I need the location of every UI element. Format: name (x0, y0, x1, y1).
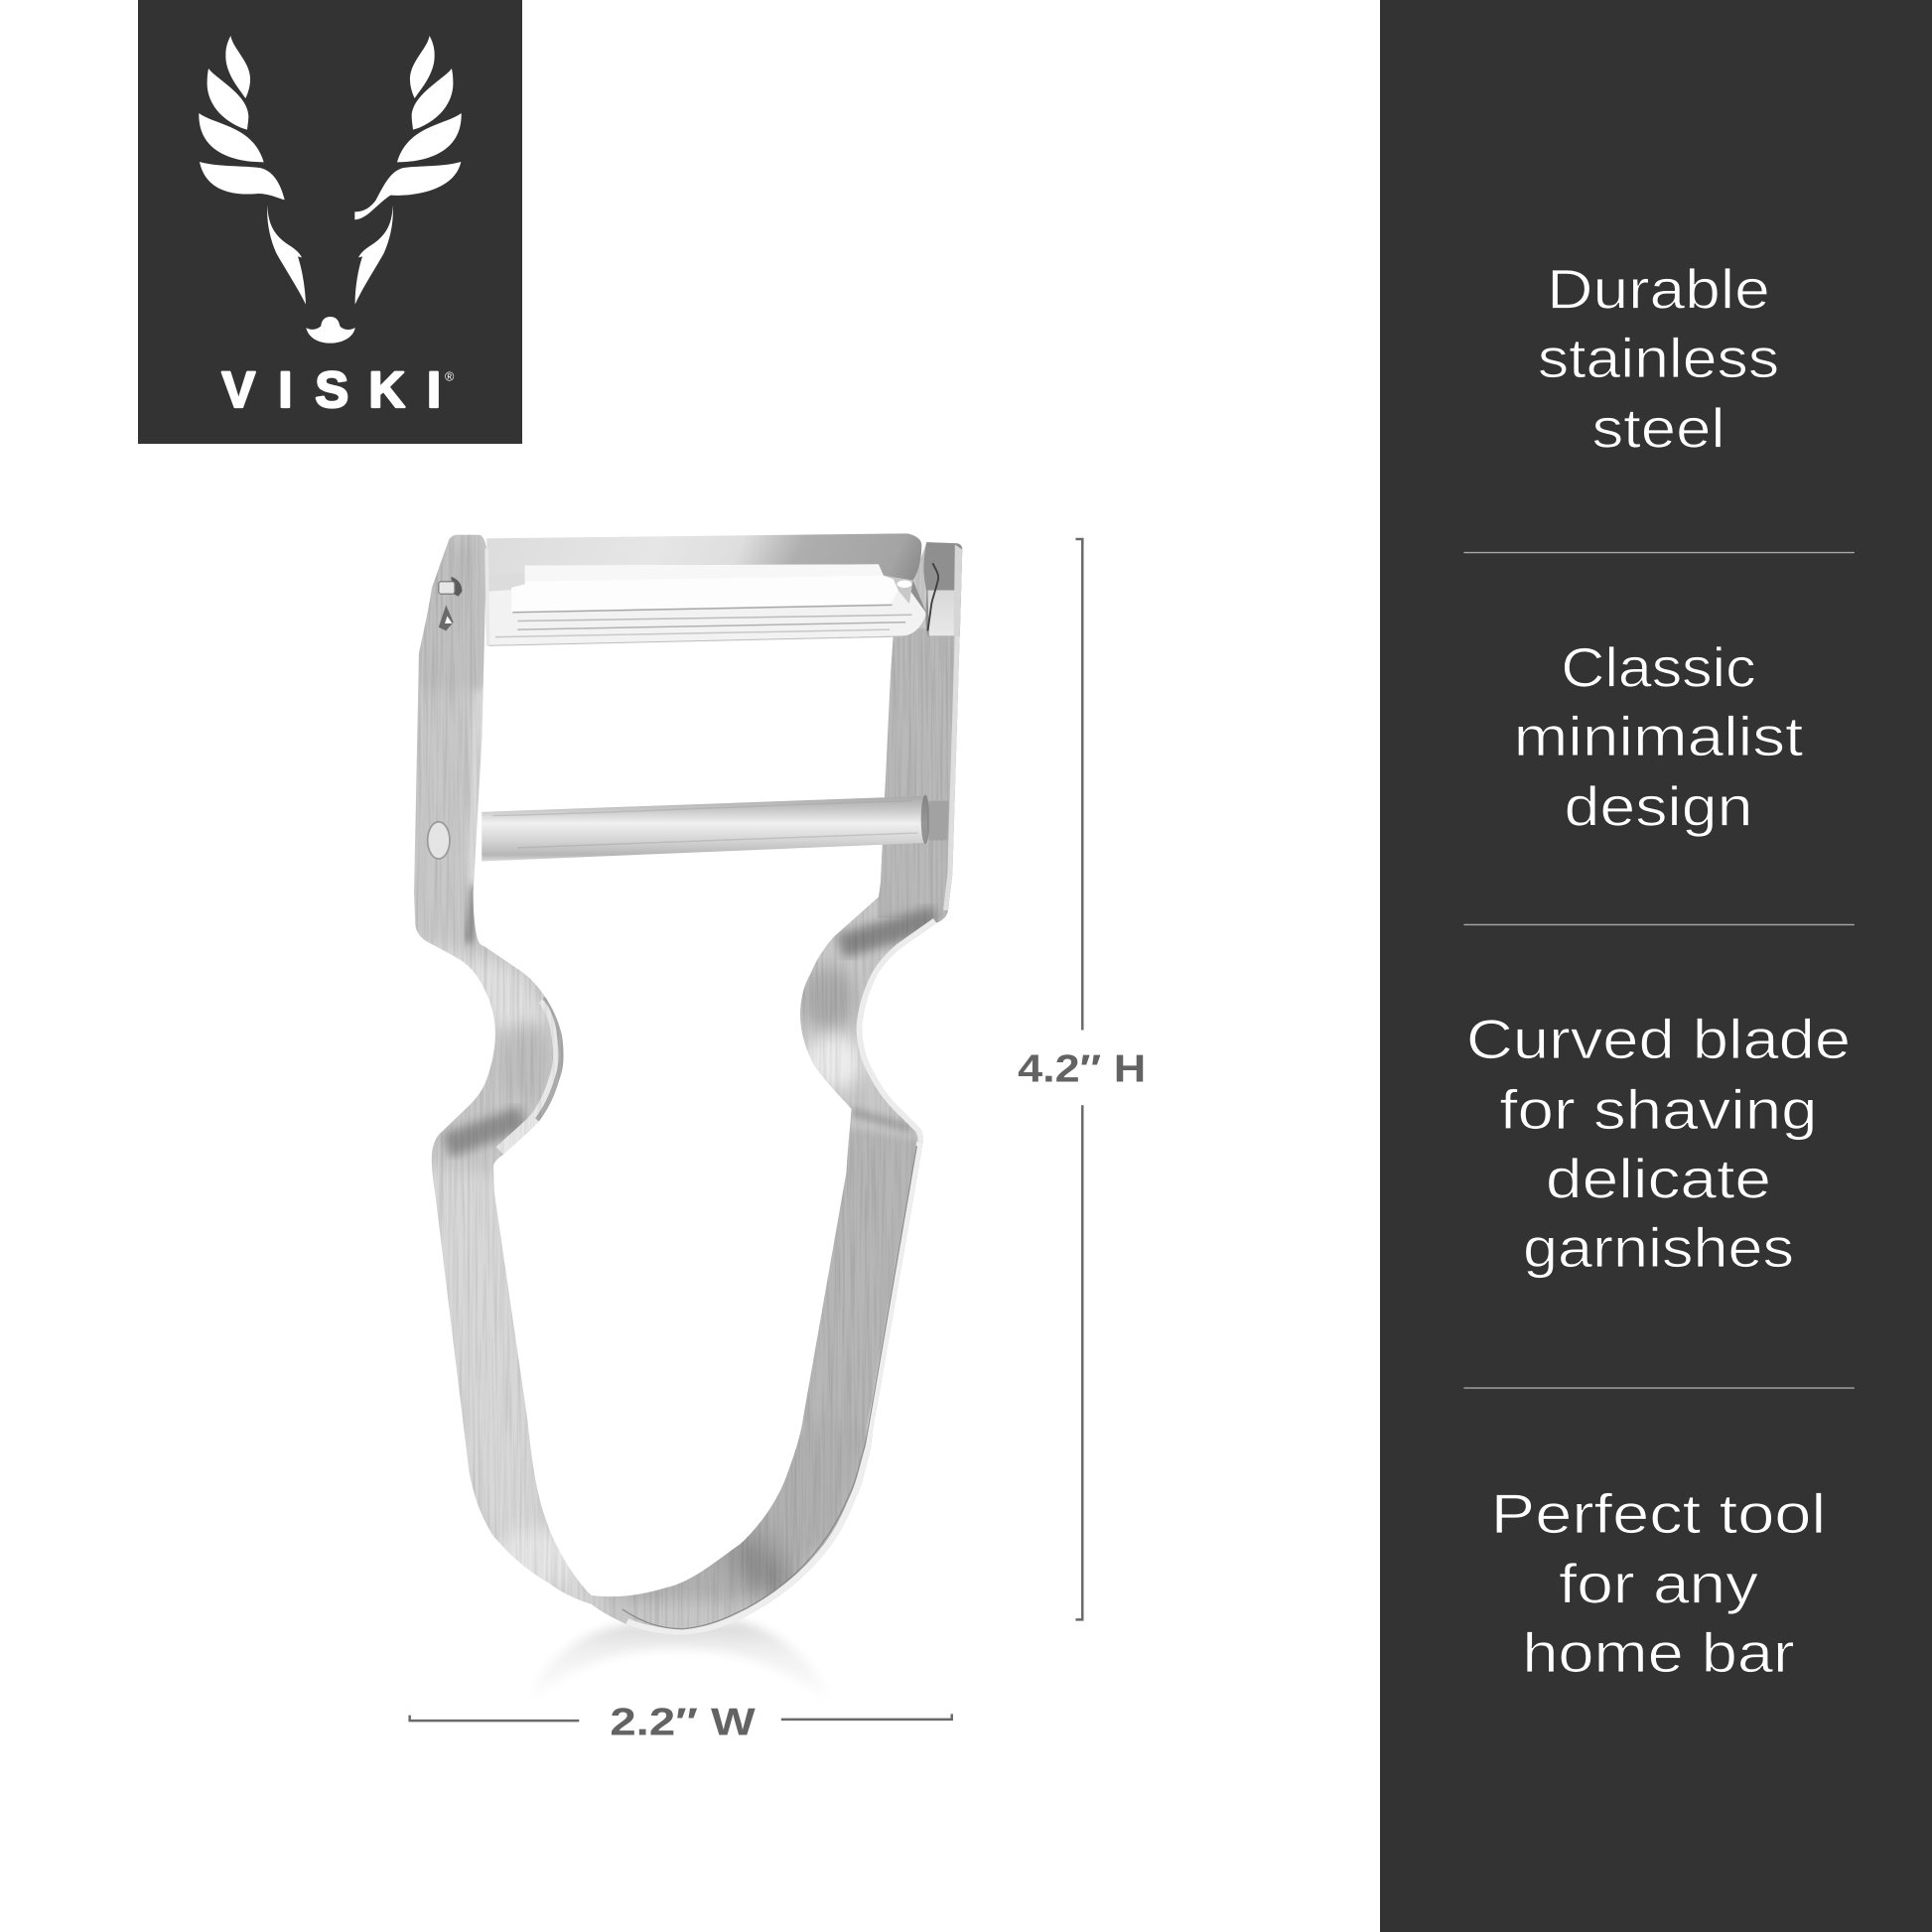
blade ridge lines (495, 605, 911, 637)
dimension: width: 2.2″ W (610, 1701, 757, 1743)
surface reflection (527, 1621, 832, 1707)
logo wordmark: ® (445, 370, 455, 384)
feature: perfect tool: for any (1559, 1553, 1758, 1615)
feature: curved blade: for shaving (1499, 1078, 1818, 1141)
feature: durable stainless steel (1538, 257, 1779, 460)
feature: durable stainless steel: Durable (1547, 257, 1770, 320)
feature: classic minimalist design: Classic (1561, 635, 1756, 698)
right arm top (923, 542, 962, 635)
feature: durable stainless steel: steel (1591, 397, 1725, 460)
peeler frame (414, 534, 962, 1634)
blade holder plate (486, 533, 926, 645)
icon: stag head logo mark (199, 36, 462, 344)
feature: perfect tool: home bar (1522, 1621, 1795, 1684)
feature: curved blade: Curved blade (1466, 1008, 1851, 1070)
feature: curved blade (1466, 1008, 1851, 1279)
feature: perfect tool: Perfect tool (1491, 1482, 1826, 1545)
peeler product image (394, 517, 986, 1651)
blade (511, 564, 898, 612)
rod (482, 796, 928, 862)
logo wordmark: VISKI (221, 361, 441, 418)
panel: feature list (1380, 0, 1932, 1932)
feature: durable stainless steel: stainless (1538, 327, 1779, 389)
dimension: height: 4.2″ H (1018, 1048, 1146, 1091)
rod rivet (428, 822, 450, 859)
left rivet pin and hole (439, 577, 462, 630)
feature: perfect tool (1491, 1482, 1826, 1684)
dimension: height (1018, 539, 1146, 1619)
feature: curved blade: delicate (1546, 1147, 1771, 1209)
panel: logo (138, 0, 522, 444)
feature: classic minimalist design (1514, 635, 1804, 838)
dimension: width (410, 1701, 952, 1743)
feature: classic minimalist design: design (1565, 775, 1752, 838)
feature: curved blade: garnishes (1523, 1216, 1794, 1279)
feature: classic minimalist design: minimalist (1514, 705, 1804, 767)
